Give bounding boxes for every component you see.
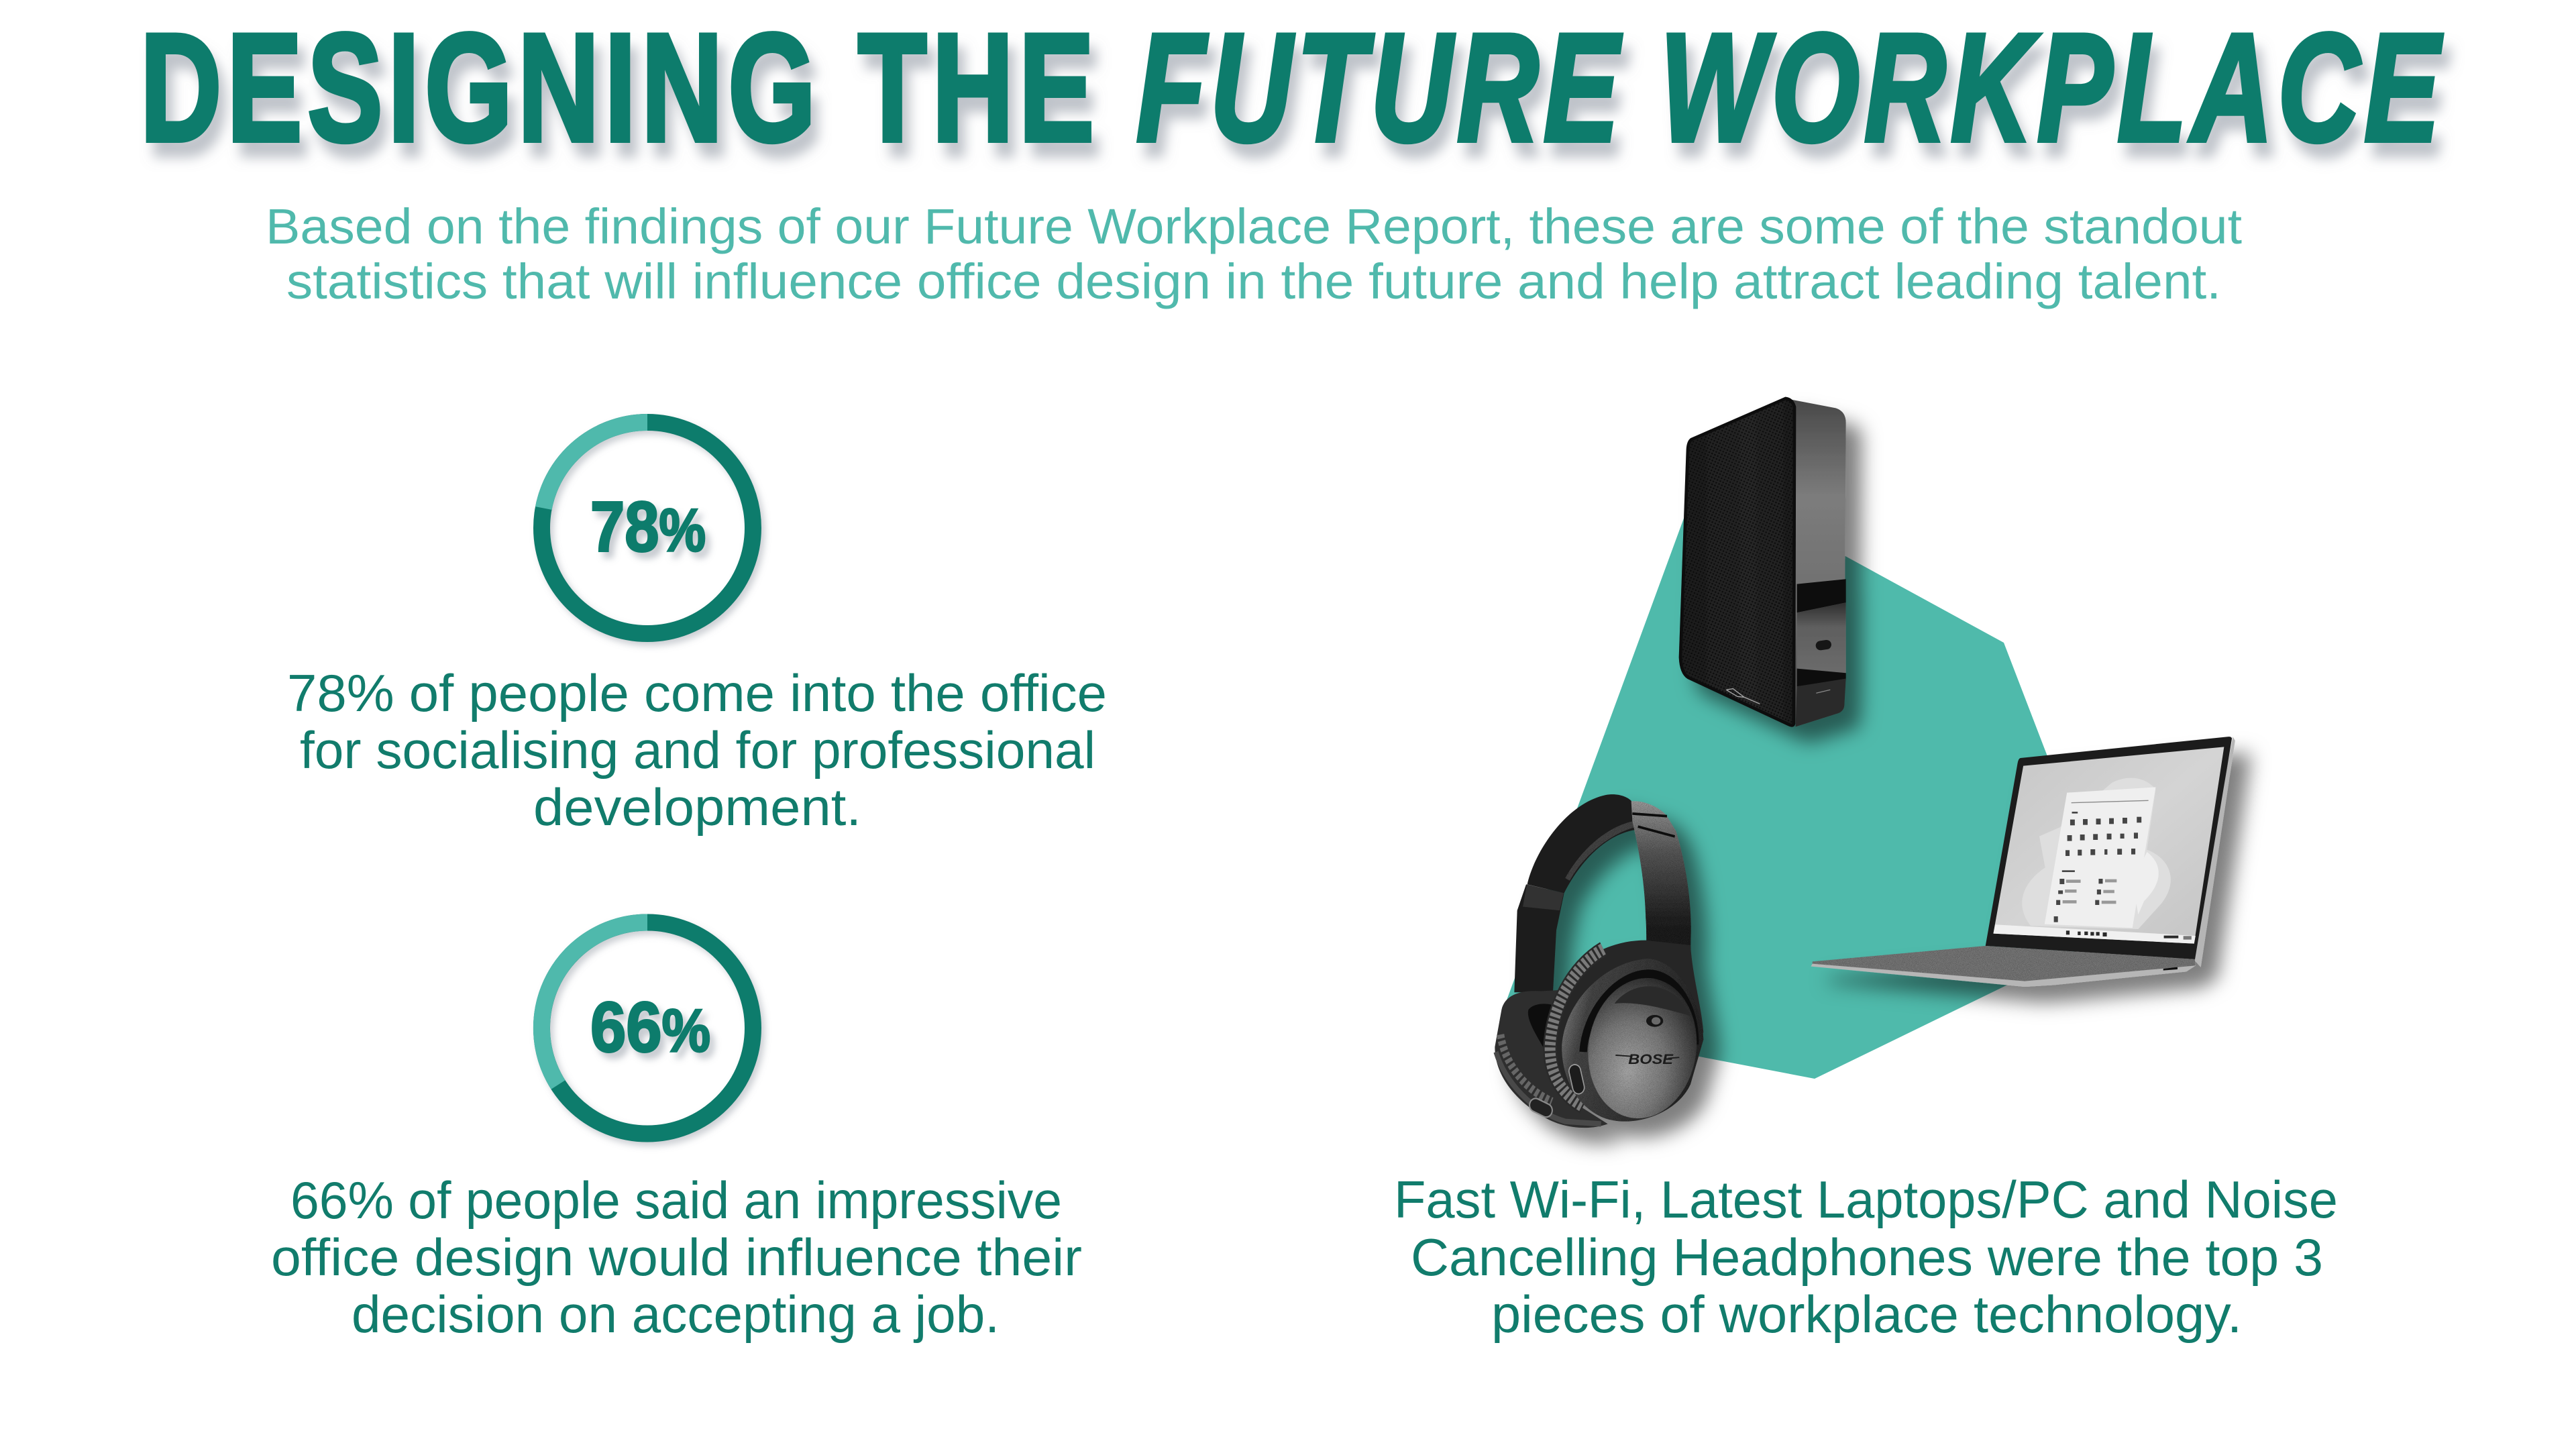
headband pad bbox=[1527, 794, 1635, 893]
wallpaper swirl bbox=[2022, 778, 2171, 929]
back cushion bbox=[1495, 990, 1608, 1128]
stat ring: 78% bbox=[542, 423, 753, 633]
teal polygon backdrop bbox=[1500, 476, 2115, 1079]
start menu panel bbox=[2045, 787, 2155, 928]
stat ring: 66% bbox=[541, 922, 753, 1134]
icon: laptop bbox=[1811, 737, 2235, 987]
power button bbox=[1646, 1015, 1663, 1027]
stat text: 78%: for socialising and for professional bbox=[300, 720, 1095, 780]
ribbed ear ring bbox=[1550, 949, 1603, 1107]
subtitle bbox=[266, 199, 2242, 309]
cup body bbox=[1562, 959, 1703, 1122]
left slider bbox=[1514, 884, 1564, 992]
stat text: 66%: office design would influence their bbox=[271, 1228, 1082, 1287]
stat text: 66%: decision on accepting a job. bbox=[352, 1285, 1000, 1344]
caption: workplace technology: pieces of workplace technology. bbox=[1491, 1285, 2242, 1344]
caption: workplace technology: Fast Wi-Fi, Latest Laptops/PC and Noise bbox=[1394, 1170, 2338, 1229]
stat text: 66%: 66% of people said an impressive bbox=[290, 1171, 1062, 1230]
earcup yoke bbox=[1550, 941, 1703, 1119]
stat ring: 66%: 66% bbox=[590, 987, 710, 1067]
title: DESIGNING THE bbox=[140, 1, 1099, 173]
stat text: 66% bbox=[271, 1171, 1082, 1344]
icon: wifi router bbox=[1680, 398, 1846, 727]
keyboard deck bbox=[1813, 946, 2195, 981]
caption: workplace technology bbox=[1394, 1170, 2338, 1344]
brand bbox=[1615, 1055, 1679, 1059]
icon: headphones: BOSE bbox=[1628, 1052, 1674, 1067]
stat text: 78%: 78% of people come into the office bbox=[287, 663, 1107, 722]
subtitle: statistics that will influence office design in the future and help attract leading talent. bbox=[286, 254, 2221, 309]
title bbox=[140, 1, 2445, 173]
subtitle: Based on the findings of our Future Workplace Report, these are some of the standout bbox=[266, 199, 2242, 254]
stat ring: 78%: 78% bbox=[590, 487, 706, 566]
stat text: 78%: development. bbox=[533, 777, 861, 837]
icon: headphones bbox=[1495, 794, 1710, 1131]
taskbar bbox=[1993, 924, 2196, 944]
right arm bbox=[1631, 801, 1692, 970]
ear plate bbox=[1575, 965, 1710, 1131]
stat text: 78% bbox=[287, 663, 1107, 837]
caption: workplace technology: Cancelling Headphones were the top 3 bbox=[1411, 1228, 2323, 1287]
